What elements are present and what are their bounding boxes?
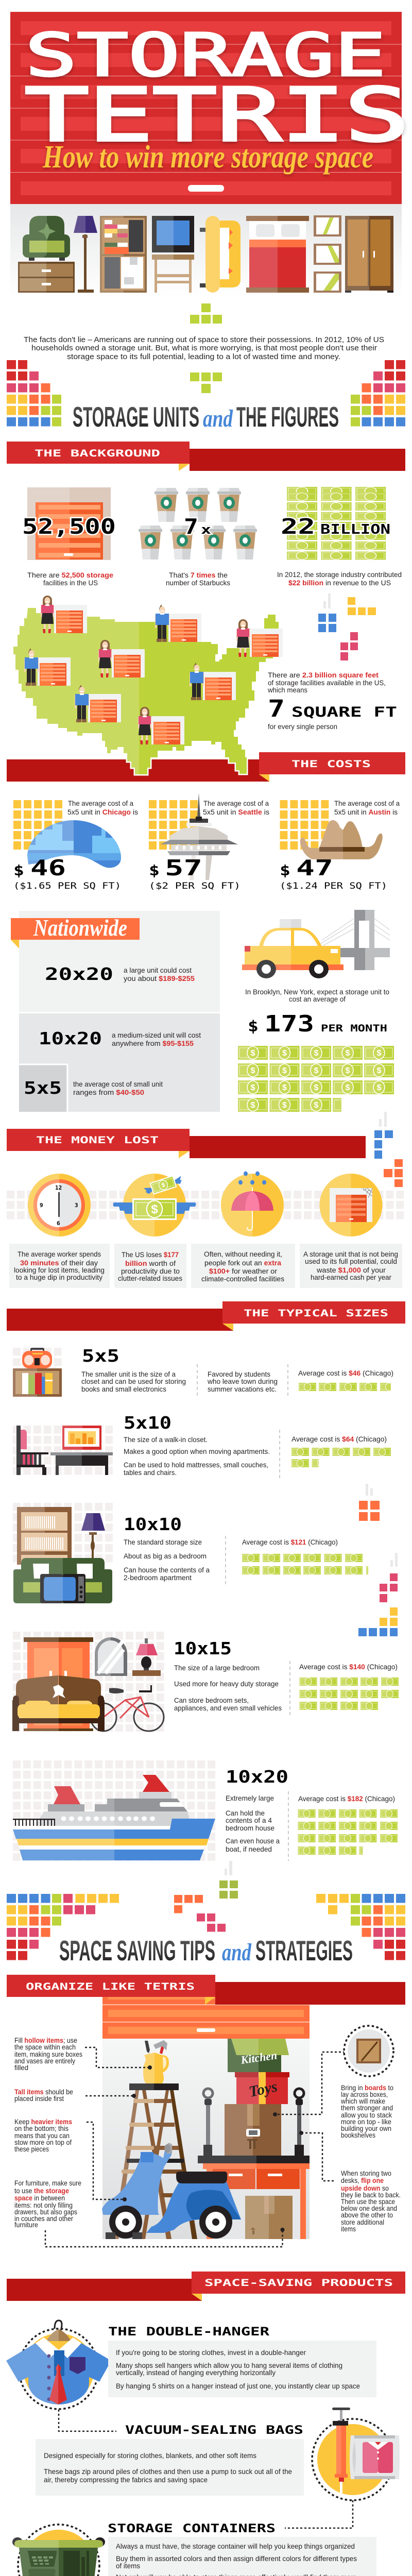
size 5x5: the average cost of small unit	[73, 1080, 163, 1088]
size 20x20: you about $189-$255	[124, 974, 195, 982]
callout: hollow items: filled	[14, 2063, 28, 2072]
icon: bills for $173: $$$$$	[251, 1083, 382, 1092]
text: square feet stat: which means	[267, 686, 307, 694]
block: Seattle cost: 5x5 unit in Seattle is	[203, 808, 269, 816]
icon: shirt on double hanger	[6, 2320, 111, 2409]
callout: boards: them stronger and	[341, 2104, 393, 2112]
ribbon: organize like tetris: ORGANIZE LIKE TETRIS	[26, 1981, 195, 1992]
text: standard size: The standard storage size	[124, 1538, 202, 1546]
icon: cowboy hat	[300, 820, 383, 859]
callout: heavier items: Keep heavier items	[14, 2117, 72, 2126]
map: pixel USA	[13, 608, 282, 774]
panel: title garage door	[10, 12, 402, 204]
text: standard size: 2-bedroom apartment	[124, 1573, 192, 1582]
callout: flip one upside down: store additional	[341, 2218, 384, 2226]
block: Seattle cost: The average cost of a	[203, 799, 269, 807]
product: vacuum-sealing bags: Designed especially for storing clothes, blankets, and other soft items	[44, 2451, 256, 2460]
icon: flying money circle	[113, 1173, 196, 1236]
product: double-hanger: vertically, instead of hanging everything horizontally	[116, 2368, 276, 2377]
icon: bills for $173: $$$	[251, 1101, 319, 1110]
label 5x10: 5x10	[124, 1413, 171, 1433]
callout: flip one upside down: Then use the space	[341, 2197, 395, 2206]
callout: tall items: Tall items should be	[14, 2088, 73, 2096]
icon: bookcase, lamp, sofa, tv	[13, 1503, 113, 1603]
decorative block stack right	[351, 360, 405, 427]
callout: hollow items: the space within each	[14, 2043, 76, 2051]
panel: worker text: 30 minutes of their day	[20, 1259, 98, 1267]
panel: worker text: The average worker spends	[18, 1250, 101, 1258]
panel: wasted unit text	[300, 1244, 402, 1288]
callout: flip one upside down: below one desk and	[341, 2204, 397, 2212]
text: square feet stat: 7	[268, 695, 285, 722]
panel: wasted unit text: used to its full potential, could	[305, 1257, 397, 1265]
icon: bills	[291, 1448, 391, 1467]
ribbon: the money lost: THE MONEY LOST	[36, 1134, 159, 1146]
product: double-hanger: THE DOUBLE-HANGER	[108, 2326, 270, 2338]
scooter	[102, 2143, 241, 2239]
size 10x20: 10x20	[39, 1028, 102, 1048]
heading: space saving tips and strategies: SPACE SAVING TIPS	[59, 1935, 215, 1967]
callout: furniture	[14, 2179, 284, 2247]
text: Brooklyn cost: cost an average of	[289, 995, 346, 1003]
panel: wasted unit text: A storage unit that is not being	[303, 1250, 398, 1258]
text: Brooklyn cost: In Brooklyn, New York, expect a storage unit to	[245, 988, 389, 996]
label 10x10: 10x10	[124, 1514, 182, 1534]
panel: worker text: to a huge dip in productivity	[16, 1273, 102, 1281]
panel: climate text: Often, without needing it,	[204, 1250, 282, 1258]
callout: furniture: drawers, but also gaps	[14, 2208, 77, 2216]
icon: umbrella circle	[221, 1172, 284, 1236]
ribbon: the background	[7, 442, 405, 471]
panel: productivity text: clutter-related issues	[118, 1274, 182, 1282]
pale block band	[7, 1191, 405, 1219]
text: smaller unit: closet and can be used for storing	[81, 1377, 186, 1385]
size row: 5x10	[13, 1413, 391, 1479]
size 20x20: 20x20	[45, 964, 113, 984]
callout: heavier items	[14, 2117, 127, 2201]
stat: 7x	[184, 514, 211, 539]
ribbon: the typical sizes: THE TYPICAL SIZES	[244, 1308, 388, 1319]
icon: armchair	[23, 216, 70, 261]
text: walk-in closet: The size of a walk-in closet.	[124, 1435, 208, 1444]
text: square feet stat: for every single person	[268, 722, 337, 731]
stacked boxes: Toys	[247, 2078, 279, 2100]
panel: productivity text: billion worth of	[125, 1259, 176, 1267]
size 5x5: 5x5	[24, 1078, 62, 1098]
label 10x20: 10x20	[226, 1767, 288, 1787]
text: large bedroom: Can store bedroom sets,	[174, 1696, 249, 1704]
product: double-hanger: Many shops sell hangers which allow you to hang several items of clothing	[116, 2361, 342, 2369]
interior	[102, 2039, 310, 2239]
title: TETRIS: TETRIS	[25, 73, 409, 158]
captions row	[27, 570, 402, 587]
callout: furniture: items: not only filling	[14, 2201, 73, 2209]
cost $46: Average cost is $46 (Chicago)	[298, 1369, 393, 1377]
ribbon: the costs tab: THE COSTS	[291, 758, 371, 770]
title: STORAGE: STORAGE	[25, 21, 386, 90]
decorative block stack: right lower	[316, 1894, 405, 1960]
icon: falling tetris pieces	[318, 594, 376, 660]
callout: hollow items: and vases are entirely	[14, 2057, 75, 2065]
text: extremely large: Extremely large	[226, 1794, 274, 1802]
icon: falling pieces right of sizes	[358, 1484, 398, 1636]
icon: floor lamp	[74, 216, 97, 293]
ribbon: the costs (dark band)	[7, 759, 269, 782]
block: Chicago cost: $	[13, 862, 24, 879]
captions row: $22 billion in revenue to the US	[288, 579, 391, 587]
icon: laundry basket	[12, 2524, 105, 2576]
panel: worker text	[9, 1244, 110, 1288]
block: Chicago cost: 5x5 unit in Chicago is	[67, 808, 138, 816]
people with units on map	[24, 596, 283, 744]
intro text: households owned a storage unit. But, what is more worrying, is that most people don't use their	[31, 344, 377, 352]
callout: tall items: placed inside first	[14, 2094, 64, 2103]
callout: furniture: space in between	[14, 2194, 65, 2202]
block: Seattle cost: 57	[165, 855, 202, 880]
stat: 22 billion: 22	[281, 514, 315, 539]
callout: heavier items: on the bottom; this	[14, 2124, 68, 2132]
callout: furniture: in couches and other	[14, 2214, 73, 2223]
decorative block stack: left lower	[7, 1894, 119, 1960]
callout: heavier items: means that you can	[14, 2131, 70, 2140]
callout: flip one upside down	[299, 2131, 401, 2233]
panel: wasted unit text: waste $1,000 of your	[316, 1266, 386, 1274]
door handle	[188, 185, 224, 192]
text: favored by students: Favored by students	[208, 1370, 270, 1378]
text: smaller unit: The smaller unit is the size of a	[81, 1370, 176, 1378]
icon: bookcase	[100, 216, 147, 293]
panel: wasted unit text: hard-earned cash per year	[311, 1273, 391, 1281]
icon: bills for $173: $$$$$	[251, 1049, 382, 1058]
decorative block stack left	[7, 360, 61, 427]
panel: productivity text	[114, 1244, 186, 1288]
size 10x20: a medium-sized unit will cost	[112, 1031, 201, 1039]
callout: boards: Bring in boards to	[341, 2083, 393, 2092]
icon: bills	[300, 1677, 399, 1710]
icon: flying money circle: $	[151, 1202, 158, 1216]
callout: flip one upside down: they lie back to back.	[341, 2191, 401, 2199]
size 5x5: ranges from $40-$50	[73, 1088, 144, 1096]
cost $64: Average cost is $64 (Chicago)	[291, 1435, 387, 1443]
intro text: The facts don't lie – Americans are running out of space to store their possessions. In 2012, 10% of US	[24, 335, 384, 344]
desk with upturned desk	[198, 2089, 310, 2239]
text: extremely large	[226, 1794, 280, 1853]
icon: bill stacks	[287, 487, 386, 560]
product: vacuum-sealing bags: air, thereby compressing the fabrics and saving space	[44, 2476, 208, 2484]
icon: vacuum pump and bag	[312, 2408, 400, 2500]
product: vacuum-sealing bags: These bags zip around piles of clothes and then use a pump to suck out all of the	[44, 2467, 292, 2476]
icon: flying money circle: $	[161, 1181, 166, 1189]
ribbon: the typical sizes	[7, 1301, 405, 1331]
stat: 22 billion	[281, 514, 390, 539]
icon: bills	[242, 1554, 384, 1574]
block: Chicago cost: 46	[30, 855, 66, 880]
callout: boards: building your own	[341, 2124, 391, 2132]
icon: bills for $173	[238, 1046, 394, 1112]
captions row: number of Starbucks	[166, 579, 230, 587]
block: Austin cost: $	[280, 862, 290, 879]
text: Brooklyn cost: 173	[264, 1011, 314, 1037]
icon: Chicago bean	[27, 820, 121, 868]
stat: 7x: x	[201, 522, 211, 537]
block: Austin cost: 5x5 unit in Austin is	[334, 808, 398, 816]
text: square feet stat: There are 2.3 billion square feet	[268, 671, 379, 679]
callout: hollow items: Fill hollow items; use	[14, 2036, 77, 2044]
ribbon: nationwide	[11, 914, 140, 948]
panel: furniture strip	[10, 204, 402, 298]
hammer and jug	[143, 2040, 169, 2084]
icon: cobwebbed unit circle	[319, 1174, 382, 1236]
callout: boards	[273, 2052, 393, 2139]
ribbon: space-saving products	[7, 2272, 405, 2301]
icon: tetris inverted T block	[190, 372, 222, 393]
text: smaller unit: books and small electronics	[81, 1385, 166, 1393]
text: extremely large: contents of a 4	[226, 1816, 272, 1824]
callout: furniture: to use the storage	[14, 2187, 69, 2195]
callout: boards: lay across boxes,	[341, 2090, 388, 2098]
icon: coffee cups	[139, 488, 257, 560]
callout: boards: bookshelves	[341, 2131, 375, 2139]
callout: heavier items: stow more on top of	[14, 2138, 72, 2146]
icon: storage building	[27, 487, 111, 560]
panel: worker text: looking for lost items, leading	[14, 1266, 105, 1274]
text: large bedroom	[174, 1664, 282, 1712]
size row: 10x10	[13, 1503, 384, 1603]
icon: clock circle: 9	[40, 1202, 43, 1209]
size 10x20	[39, 1028, 201, 1048]
text: standard size: Can house the contents of a	[124, 1566, 210, 1574]
text: standard size: About as big as a bedroom	[124, 1552, 207, 1560]
icon: tetris T block	[190, 303, 222, 324]
icon: bills for $173: $$$$$	[251, 1066, 382, 1075]
text: smaller unit	[81, 1370, 186, 1393]
size row: 10x20	[13, 1760, 398, 1861]
panel: climate text: $100+ for weather or	[209, 1267, 277, 1275]
cost $121: Average cost is $121 (Chicago)	[242, 1538, 338, 1546]
product: storage containers: Always a must have, the storage container will help you keep things organized	[116, 2542, 355, 2550]
roll door	[102, 1990, 310, 2039]
stacked boxes: Kitchen	[239, 2048, 278, 2066]
product: vacuum-sealing bags	[36, 2424, 304, 2496]
text: large bedroom: The size of a large bedroom	[174, 1664, 260, 1672]
icon: clock circle	[28, 1174, 91, 1236]
block: Chicago cost: ($1.65 PER SQ FT)	[13, 881, 121, 891]
block: Chicago cost	[13, 799, 138, 891]
icon: drawer chest	[18, 262, 75, 293]
text: Brooklyn cost	[245, 988, 389, 1037]
stat: 22 billion: BILLION	[320, 522, 390, 537]
callout: furniture: furniture	[14, 2221, 38, 2229]
text: favored by students: who leave town during	[207, 1377, 278, 1385]
captions row: That's 7 times the	[169, 571, 228, 579]
captions row: There are 52,500 storage	[27, 571, 113, 579]
ribbon: the money lost	[7, 1129, 366, 1158]
heading: storage units and the figures: STORAGE UNITS	[73, 401, 199, 433]
size row: 10x15	[12, 1632, 399, 1732]
panel: productivity text: The US loses $177	[122, 1250, 179, 1259]
product: storage containers: STORAGE CONTAINERS	[108, 2522, 276, 2535]
icon: taxi and bridge	[242, 910, 390, 978]
size 5x5	[24, 1078, 163, 1098]
ribbon: nationwide: Nationwide	[33, 914, 127, 941]
block: Austin cost	[280, 799, 400, 891]
icon: clock circle: 12	[55, 1184, 62, 1191]
icon: tv on table	[152, 216, 194, 293]
label 5x5: 5x5	[82, 1346, 119, 1366]
text: walk-in closet: Makes a good option when moving apartments.	[124, 1447, 270, 1455]
product: storage containers: of items	[116, 2562, 140, 2570]
captions row: In 2012, the storage industry contributed	[277, 570, 402, 579]
icon: wardrobe, mirror, lamp, bed, bicycle	[12, 1632, 164, 1732]
text: Brooklyn cost: $	[248, 1018, 259, 1035]
product: storage containers: Buy them in assorted colors and then assign different colors for different types	[116, 2554, 357, 2563]
text: square feet stat: SQUARE FT	[291, 704, 397, 720]
icon: bills	[298, 1809, 398, 1855]
ribbon: the background: THE BACKGROUND	[35, 448, 160, 459]
block: Austin cost: 47	[296, 855, 333, 880]
heading: storage units and the figures: and	[203, 405, 233, 432]
product: double-hanger: If you're going to be storing clothes, invest in a double-hanger	[116, 2348, 306, 2357]
text: favored by students	[207, 1370, 278, 1393]
text: standard size	[124, 1538, 210, 1582]
text: extremely large: Can even house a	[226, 1837, 280, 1845]
icon: wardrobe	[345, 216, 393, 293]
block: Austin cost: ($1.24 PER SQ FT)	[280, 881, 387, 891]
text: walk-in closet: Can be used to hold mattresses, small couches,	[124, 1461, 268, 1469]
icon: yellow sofa side view	[200, 216, 241, 293]
icon: cruise ship	[13, 1760, 216, 1861]
text: extremely large: bedroom house	[226, 1824, 274, 1832]
heading: space saving tips and strategies: and	[222, 1939, 252, 1966]
size 10x20: anywhere from $95-$155	[112, 1039, 194, 1047]
text: extremely large: Can hold the	[226, 1809, 265, 1817]
callout: heavier items: these pieces	[14, 2145, 49, 2153]
text: walk-in closet	[124, 1435, 270, 1477]
panel: climate text	[191, 1244, 295, 1288]
icon: clock circle: 3	[75, 1202, 78, 1209]
callout: flip one upside down: above the other to	[341, 2211, 393, 2219]
size row: 5x5	[13, 1346, 398, 1398]
callout: hollow items: item, making sure boxes	[14, 2050, 82, 2058]
size 20x20: a large unit could cost	[124, 966, 192, 974]
callout: boards: allow you to stack	[341, 2111, 392, 2119]
size 20x20	[45, 964, 195, 984]
panel: climate text: people fork out an extra	[204, 1259, 281, 1267]
panel: productivity text: productivity due to	[121, 1267, 180, 1275]
illustration: organized storage unit	[102, 1990, 310, 2239]
text: Brooklyn cost: PER MONTH	[321, 1023, 387, 1034]
block: Seattle cost: $	[149, 862, 160, 879]
callout: flip one upside down: When storing two	[341, 2169, 391, 2177]
panel: nationwide sizes	[11, 911, 220, 1112]
icon: picture frames	[314, 215, 341, 293]
product: vacuum-sealing bags: VACUUM-SEALING BAGS	[125, 2424, 303, 2437]
intro text: storage space to its full potential, leading to a lot of wasted time and money.	[67, 352, 340, 361]
ribbon: the costs tab	[259, 752, 405, 782]
icon: clock circle: 6	[57, 1220, 60, 1227]
icon: red cabinet with cushions	[246, 216, 309, 293]
callout: flip one upside down: items	[341, 2225, 356, 2233]
callout: hollow items	[14, 2036, 152, 2072]
icon: chair, picture and desk	[13, 1426, 113, 1475]
captions row: facilities in the US	[43, 579, 98, 587]
stacked boxes	[225, 2039, 289, 2156]
panel: climate text: climate-controlled facilities	[201, 1275, 284, 1283]
product: double-hanger: By hanging 5 shirts on a hanger instead of just one, you instantly clear up space	[116, 2382, 360, 2390]
label 10x15: 10x15	[174, 1638, 232, 1658]
block: Seattle cost	[149, 793, 269, 891]
callout: furniture: For furniture, make sure	[14, 2179, 81, 2187]
callout: boards: more on top - like	[341, 2117, 391, 2126]
icon: radio and books	[13, 1348, 62, 1397]
intro text	[24, 335, 384, 361]
cost $182: Average cost is $182 (Chicago)	[298, 1794, 395, 1803]
text: square feet stat	[267, 671, 397, 731]
stat: 7x: 7	[184, 514, 198, 539]
ribbon: space-saving products: SPACE-SAVING PRODUCTS	[204, 2277, 393, 2289]
icon: board in dashed circle	[344, 2026, 393, 2076]
icon: middle falling pieces	[174, 1861, 238, 1932]
icon: bills	[299, 1383, 398, 1391]
icon: space needle	[160, 793, 238, 880]
cost $140: Average cost is $140 (Chicago)	[299, 1663, 398, 1671]
block: Austin cost: The average cost of a	[334, 799, 400, 807]
text: large bedroom: Used more for heavy duty storage	[174, 1680, 279, 1688]
ladder	[113, 2083, 197, 2239]
callout: flip one upside down: desks, flip one	[341, 2176, 384, 2184]
icon: falling pieces right	[374, 1112, 403, 1187]
ribbon: organize like tetris	[7, 1975, 405, 2005]
text: square feet stat: of storage facilities available in the US,	[268, 679, 386, 687]
product: double-hanger	[108, 2326, 376, 2397]
text: favored by students: summer vacations etc.	[208, 1385, 277, 1393]
callout: tall items	[14, 2088, 136, 2103]
stat: 52,500: 52,500	[22, 514, 116, 539]
text: extremely large: boat, if needed	[226, 1845, 272, 1853]
callout: flip one upside down: upside down so	[341, 2184, 389, 2192]
block: Seattle cost: ($2 PER SQ FT)	[149, 881, 241, 891]
block: Chicago cost: The average cost of a	[68, 799, 133, 807]
text: large bedroom: appliances, and even small vehicles	[174, 1704, 282, 1712]
text: walk-in closet: tables and chairs.	[124, 1468, 177, 1477]
callout: boards: which will make	[340, 2097, 385, 2105]
product: storage containers	[108, 2522, 376, 2576]
